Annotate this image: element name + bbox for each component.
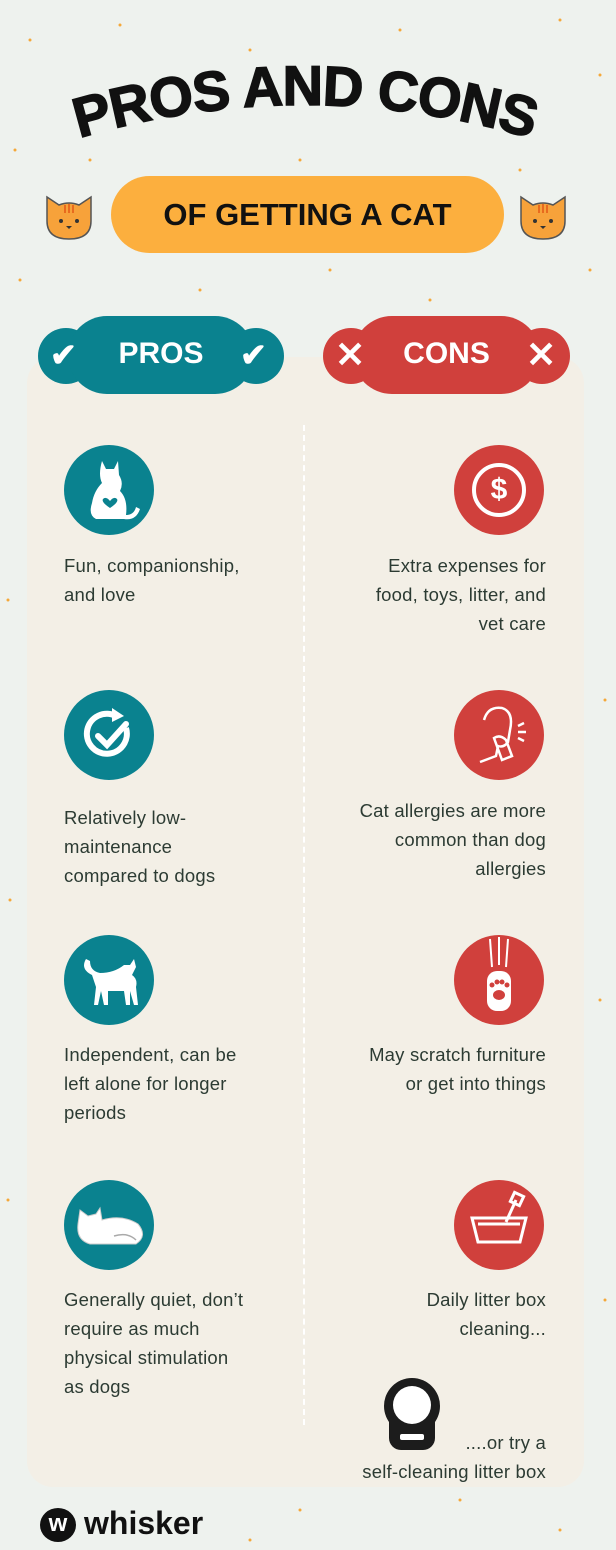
pros header: ✔ [50,337,77,373]
con 2 text: allergies [475,858,546,879]
icon: cat heart [64,445,154,535]
icon: dollar: $ [491,473,507,506]
con 1 text: vet care [479,613,546,634]
con 2 text: Cat allergies are more [360,800,546,821]
icon: sneeze [454,690,544,780]
pro 2 text: maintenance [64,836,172,857]
litter box text: ....or try a [465,1432,546,1453]
icon: paw scratch [454,935,544,1025]
pro 3 text [64,1044,237,1123]
pro 4 text [64,1289,243,1397]
pro 4 text: Generally quiet, don’t [64,1289,243,1310]
pro 1 text [64,555,240,605]
icon: self-cleaning litter box [384,1378,440,1450]
pros header: PROS [118,337,204,370]
litter box text [362,1432,546,1482]
icon: litter box [454,1180,544,1270]
pro 3 text: periods [64,1102,126,1123]
pros header: ✔ [240,337,267,373]
icon: dollar [454,445,544,535]
pro 2 text: compared to dogs [64,865,215,886]
con 3 text: or get into things [406,1073,546,1094]
con 4 text: Daily litter box [427,1289,546,1310]
icon: sleeping cat [64,1180,154,1270]
pro 1 text: and love [64,584,136,605]
pro 2 text: Relatively low- [64,807,186,828]
logo: whisker: whisker [84,1505,203,1541]
con 1 text: Extra expenses for [388,555,546,576]
con 3 text: May scratch furniture [369,1044,546,1065]
logo: whisker: w [49,1510,67,1537]
icon: cat face right [520,196,566,240]
con 2 text [360,800,546,879]
con 1 text: food, toys, litter, and [376,584,546,605]
litter box text: self-cleaning litter box [362,1461,546,1482]
pro 2 text [64,807,215,886]
icon: check cycle [64,690,154,780]
con 4 text: cleaning... [459,1318,546,1339]
con 1 text [376,555,546,634]
pro 3 text: Independent, can be [64,1044,237,1065]
pro 1 text: Fun, companionship, [64,555,240,576]
pro 4 text: physical stimulation [64,1347,228,1368]
pro 3 text: left alone for longer [64,1073,227,1094]
cons header: CONS [403,337,490,370]
subtitle pill: OF GETTING A CAT [163,197,452,232]
pro 4 text: as dogs [64,1376,130,1397]
con 4 text [427,1289,546,1339]
cons header: ✕ [526,334,556,375]
con 3 text [369,1044,546,1094]
icon: cat face left [46,196,92,240]
pro 4 text: require as much [64,1318,200,1339]
cons header: ✕ [335,334,365,375]
icon: walking cat [64,935,154,1025]
con 2 text: common than dog [395,829,546,850]
cons header [323,316,570,394]
divider [303,425,305,1425]
subtitle pill [111,176,504,253]
panel: content [27,357,584,1487]
pros header [38,316,284,394]
